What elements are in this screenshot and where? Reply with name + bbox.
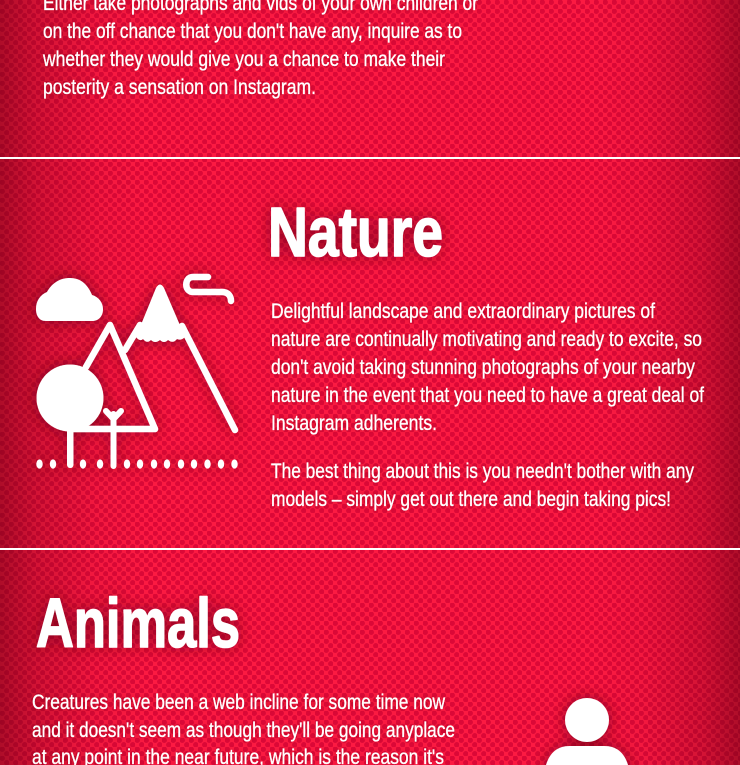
icon part: round tree	[36, 364, 104, 468]
icon part: wind	[186, 277, 231, 301]
heading: Animals: Animals	[36, 584, 240, 662]
icon part: cloud	[36, 278, 103, 321]
text block: animals paragraph: Creatures have been a web incline for some time now	[32, 691, 446, 714]
panel: animals section	[0, 550, 740, 765]
text block: nature paragraph two	[271, 460, 694, 511]
text block: family paragraph: on the off chance that you don't have any, inquire as to	[43, 20, 462, 43]
icon part: snow-capped mountain	[136, 284, 185, 342]
icon part: small tree	[106, 411, 121, 466]
icon part: mountain outlines	[72, 325, 235, 430]
icon: person	[546, 698, 628, 765]
panel: family intro (top section)	[0, 0, 740, 157]
icon: landscape with cloud, mountains and trees	[36, 277, 238, 469]
text block: nature paragraph two: models – simply get out there and begin taking pics!	[271, 488, 671, 511]
text block: animals paragraph	[32, 691, 455, 765]
heading: Nature: Nature	[268, 193, 443, 271]
text block: nature paragraph one: Delightful landscape and extraordinary pictures of	[271, 300, 655, 323]
text block: family paragraph: posterity a sensation on Instagram.	[43, 76, 316, 99]
text block: family paragraph	[42, 0, 478, 99]
text block: nature paragraph one	[271, 300, 704, 435]
text block: animals paragraph: and it doesn't seem as though they'll be going anyplace	[32, 719, 455, 742]
panel: nature section	[0, 159, 740, 548]
text block: nature paragraph one: Instagram adherents.	[271, 412, 437, 435]
icon part: dotted ground	[36, 459, 238, 469]
text block: family paragraph: whether they would give you a chance to make their	[42, 48, 445, 71]
